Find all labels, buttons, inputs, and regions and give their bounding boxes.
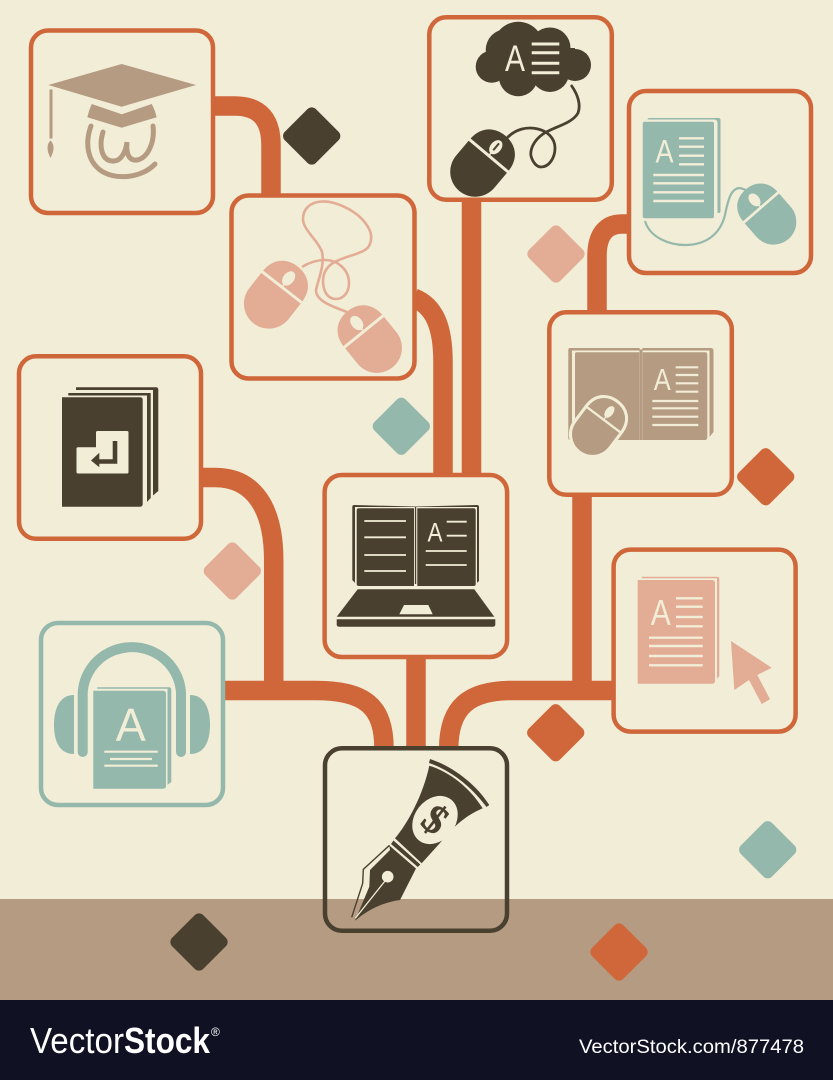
icon: mortarboard — [47, 64, 196, 158]
icon: open tan book — [568, 348, 714, 440]
ground band — [0, 899, 833, 1000]
diamond markers — [168, 105, 799, 983]
panel: laptop with e-book — [325, 475, 507, 657]
logo wordmark: Vector — [30, 1020, 124, 1061]
logo wordmark: Stock — [124, 1020, 211, 1061]
icon: headphones — [54, 647, 210, 754]
connector lines — [201, 106, 629, 749]
icon: dark mouse — [439, 119, 525, 208]
icon: teal document — [643, 118, 720, 220]
panel: two connected mice — [232, 196, 414, 384]
icon: right mouse — [327, 295, 413, 384]
icon: book stack — [62, 387, 158, 507]
icon: open tan book: A — [654, 362, 671, 397]
icon: pink document: A — [651, 592, 671, 633]
icon: pink document — [638, 577, 719, 684]
icon: return key — [78, 432, 127, 472]
icon: fountain pen: $ — [413, 795, 458, 844]
stock id text: VectorStock.com/877478 — [579, 1036, 804, 1058]
icon: at sign — [88, 126, 155, 177]
icon: mouse cable — [302, 201, 371, 312]
logo wordmark — [30, 1020, 220, 1061]
panel: graduation cap with at sign — [31, 30, 213, 213]
panel: audio book with headphones — [41, 623, 223, 805]
icon: laptop — [337, 505, 495, 627]
panel: document with teal mouse — [629, 91, 811, 273]
icon: teal mouse — [728, 174, 806, 255]
icon: audio book: A — [116, 699, 146, 751]
icon: fountain pen — [352, 759, 489, 921]
icon: cursor arrow — [731, 641, 772, 704]
icon: tan mouse — [561, 388, 636, 466]
icon: teal cable — [645, 188, 746, 245]
panel: cloud and mouse — [429, 17, 612, 208]
icon: document cloud: A — [505, 38, 525, 79]
icon: document cloud — [476, 22, 591, 96]
panel: book stack with return key — [19, 356, 201, 539]
icon: left mouse — [233, 251, 318, 339]
panel: document with cursor — [614, 550, 796, 732]
logo wordmark: ® — [211, 1025, 220, 1039]
icon: audio book — [93, 687, 171, 789]
panel: dollar fountain pen — [325, 748, 507, 931]
icon: cable — [508, 86, 579, 167]
footer bar — [0, 1000, 833, 1080]
icon: teal document: A — [656, 134, 674, 170]
panel: open book with mouse — [549, 312, 732, 495]
icon: laptop: A — [428, 518, 442, 548]
